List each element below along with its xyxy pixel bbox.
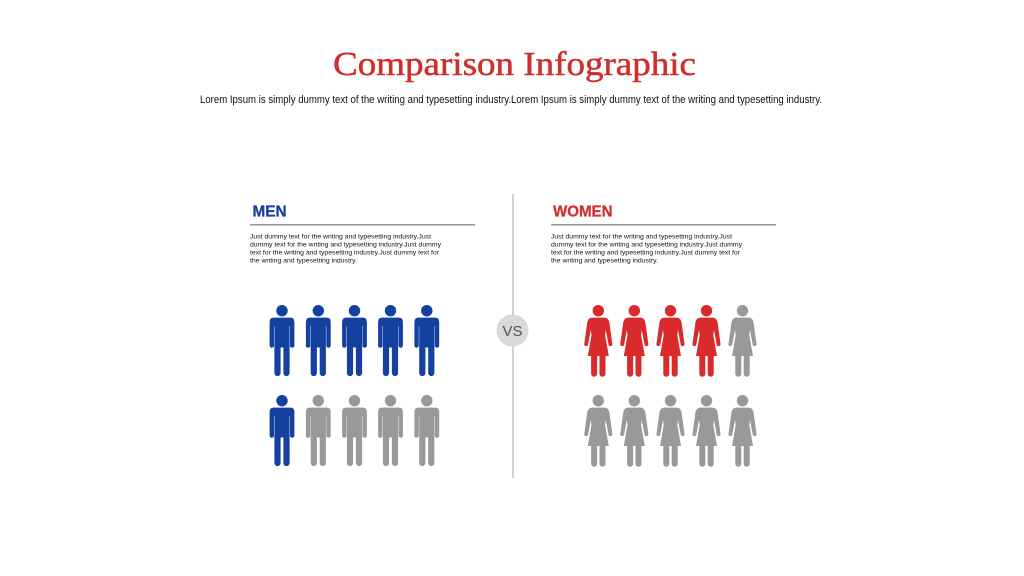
men description: text for the writing and typesetting industry.Just dummy text for — [250, 250, 440, 256]
men description — [250, 234, 442, 264]
icon: man 4 — [378, 305, 403, 376]
center divider — [512, 194, 514, 478]
men pictogram: 6 of 10 highlighted — [270, 305, 439, 466]
icon: woman 3 — [656, 305, 685, 377]
men heading rule — [250, 224, 475, 226]
title: Comparison Infographic — [333, 46, 696, 83]
icon: woman 6 — [584, 395, 612, 467]
icon: man 9 — [378, 395, 403, 466]
icon: woman 2 — [620, 305, 648, 377]
men description: Just dummy text for the writing and typesetting industry.Just — [250, 234, 431, 240]
icon: woman 8 — [656, 395, 685, 467]
VS badge — [496, 314, 528, 346]
icon: man 7 — [306, 395, 331, 466]
icon: woman 5 — [728, 305, 757, 377]
women heading rule — [551, 224, 776, 226]
women heading: WOMEN — [553, 203, 612, 220]
icon: man 2 — [306, 305, 331, 376]
icon: woman 1 — [584, 305, 612, 377]
subtitle: Lorem Ipsum is simply dummy text of the writing and typesetting industry.Lorem Ipsum is simply dummy text of the writing and typesetting industry. — [200, 94, 822, 106]
panel: women — [551, 203, 776, 467]
VS badge: VS — [502, 324, 522, 340]
women description: the writing and typesetting industry. — [551, 258, 658, 264]
icon: woman 9 — [692, 395, 721, 467]
men heading: MEN — [252, 203, 286, 220]
icon: man 1 — [270, 305, 294, 376]
icon: woman 7 — [620, 395, 648, 467]
women description: text for the writing and typesetting industry.Just dummy text for — [551, 250, 741, 256]
men description: dummy text for the writing and typesetting industry.Just dummy — [250, 242, 442, 248]
icon: man 3 — [342, 305, 367, 376]
women description: dummy text for the writing and typesetting industry.Just dummy — [551, 242, 743, 248]
icon: woman 10 — [728, 395, 757, 467]
women description: Just dummy text for the writing and typesetting industry.Just — [551, 234, 732, 240]
icon: man 10 — [414, 395, 439, 466]
icon: woman 4 — [692, 305, 721, 377]
icon: man 8 — [342, 395, 367, 466]
women description — [551, 234, 743, 264]
women pictogram: 4 of 10 highlighted — [584, 305, 757, 467]
men description: the writing and typesetting industry. — [250, 258, 357, 264]
icon: man 5 — [414, 305, 439, 376]
panel: men — [250, 203, 475, 466]
icon: man 6 — [270, 395, 294, 466]
